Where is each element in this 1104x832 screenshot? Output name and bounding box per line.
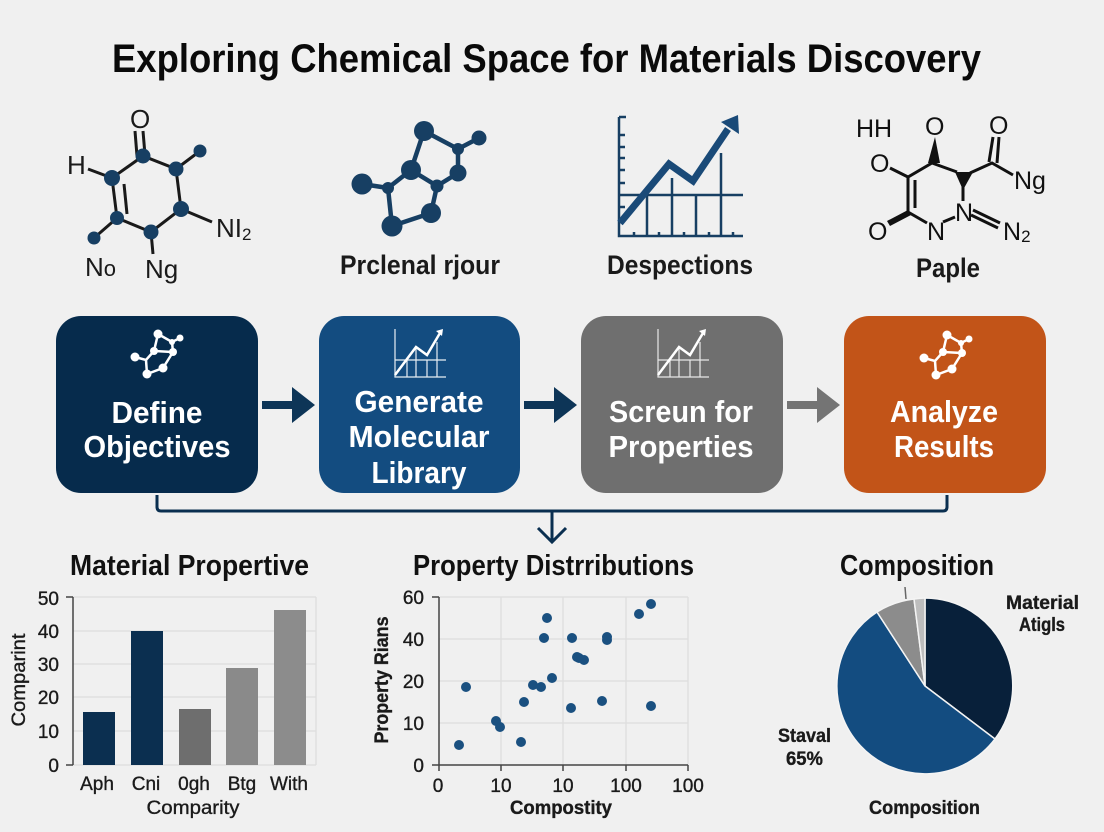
- y axis labels: [38, 589, 59, 777]
- icon: white molecule: [130, 330, 184, 378]
- heading: Composition: Composition: [840, 550, 994, 582]
- y axis labels: 50: [38, 589, 59, 610]
- label: Paple: Paple: [916, 253, 980, 283]
- panel: Define Objectives: Define: [112, 395, 202, 430]
- arrow: step two to three: [524, 387, 577, 423]
- heading: Material Propertive: Material Propertive: [70, 550, 309, 582]
- y axis labels: 20: [403, 672, 424, 693]
- y axis title: Comparint: [9, 633, 30, 726]
- pie slices: [837, 598, 1013, 774]
- panel: Define Objectives: [56, 316, 258, 493]
- icon: skeletal structure with labels, right: O: [870, 150, 889, 178]
- icon: skeletal structure with labels, right: O: [989, 112, 1008, 140]
- arrow: step one to two: [262, 387, 315, 423]
- y axis labels: 30: [38, 655, 59, 676]
- x axis labels: Comparity: [146, 798, 240, 819]
- x axis labels: With: [270, 774, 308, 795]
- title: Exploring Chemical Space for Materials Discovery: [112, 37, 982, 81]
- y axis labels: 0: [48, 756, 59, 777]
- panel: Generate Molecular Library: Generate: [354, 384, 484, 419]
- icon: white molecule: [920, 330, 972, 380]
- icon: ball and stick molecule, centre left: [352, 121, 486, 236]
- x axis labels: Aph: [80, 774, 114, 795]
- icon: skeletal structure with labels, right: N: [1003, 218, 1021, 246]
- y axis labels: 0: [413, 756, 424, 777]
- icon: skeletal structure with labels, right: HH: [856, 115, 892, 143]
- x axis labels: Cni: [132, 774, 160, 795]
- panel: bar chart: [9, 550, 316, 819]
- bars: [83, 610, 306, 765]
- slice labels: 65%: [786, 749, 823, 770]
- y axis labels: 60: [403, 588, 424, 609]
- icon: skeletal structure with labels, right: N: [955, 199, 973, 227]
- y axis labels: 10: [403, 714, 424, 735]
- slice labels: [778, 593, 1079, 819]
- icon: skeletal structure with labels, right: Ng: [1014, 167, 1046, 195]
- panel: Define Objectives: Objectives: [84, 429, 230, 464]
- x axis labels: 0: [433, 776, 443, 797]
- icon: molecule with labels, left: No: [85, 252, 116, 282]
- y axis labels: 40: [38, 622, 59, 643]
- y axis labels: 40: [403, 630, 424, 651]
- slice labels: Atigls: [1019, 615, 1065, 636]
- panel: pie chart: [778, 550, 1079, 819]
- icon: skeletal structure with labels, right: O: [925, 113, 944, 141]
- x axis labels: 100: [610, 776, 642, 797]
- arrow: step three to four: [787, 387, 840, 423]
- x axis labels: Compostity: [510, 798, 612, 819]
- label: Despections: Despections: [607, 250, 753, 280]
- icon: molecule with labels, left: 2: [242, 225, 251, 244]
- icon: skeletal structure with labels, right: 2: [1021, 227, 1031, 246]
- panel: Analyze Results: Results: [894, 429, 994, 464]
- arrow: bracket joining steps to charts: [157, 495, 947, 542]
- x axis labels: 100: [672, 776, 704, 797]
- icon: skeletal structure with labels, right: O: [868, 218, 887, 246]
- label: Prclenal rjour: Prclenal rjour: [340, 250, 500, 280]
- heading: Property Distrributions: Property Distrributions: [413, 550, 694, 582]
- panel: Screun for Properties: Properties: [608, 429, 754, 464]
- icon: molecule with labels, left: H: [67, 150, 86, 180]
- y axis title: Property Rians: [372, 616, 393, 744]
- icon: skeletal structure with labels, right: N: [927, 218, 945, 246]
- panel: scatter plot: [372, 550, 704, 819]
- icon: molecule with labels, left: [67, 104, 251, 284]
- panel: Screun for Properties: [581, 316, 783, 493]
- icon: white line chart: [658, 329, 709, 377]
- scatter points: [454, 599, 656, 750]
- panel: Screun for Properties: Screun for: [609, 394, 753, 429]
- icon: molecule with labels, left: Ng: [145, 254, 178, 284]
- x axis labels: 10: [552, 776, 574, 797]
- y axis labels: 10: [38, 722, 59, 743]
- x axis labels: [80, 774, 308, 819]
- y axis labels: [403, 588, 424, 777]
- icon: molecule with labels, left: O: [130, 104, 150, 134]
- icon: line chart, centre right: [619, 115, 743, 236]
- x axis labels: Btg: [228, 774, 256, 795]
- icon: white line chart: [395, 329, 446, 377]
- slice labels: Composition: [869, 798, 980, 819]
- panel: Analyze Results: [844, 316, 1046, 493]
- panel: Generate Molecular Library: Molecular: [348, 419, 490, 454]
- x axis labels: 10: [490, 776, 512, 797]
- x axis labels: [433, 776, 704, 819]
- slice labels: Staval: [778, 726, 831, 747]
- panel: Analyze Results: Analyze: [890, 394, 998, 429]
- icon: skeletal structure with labels, right: [856, 112, 1046, 246]
- icon: molecule with labels, left: NI: [216, 213, 242, 243]
- panel: Generate Molecular Library: [319, 316, 520, 493]
- y axis labels: 20: [38, 688, 59, 709]
- slice labels: Material: [1006, 593, 1079, 614]
- panel: Generate Molecular Library: Library: [372, 455, 467, 490]
- x axis labels: 0gh: [178, 774, 210, 795]
